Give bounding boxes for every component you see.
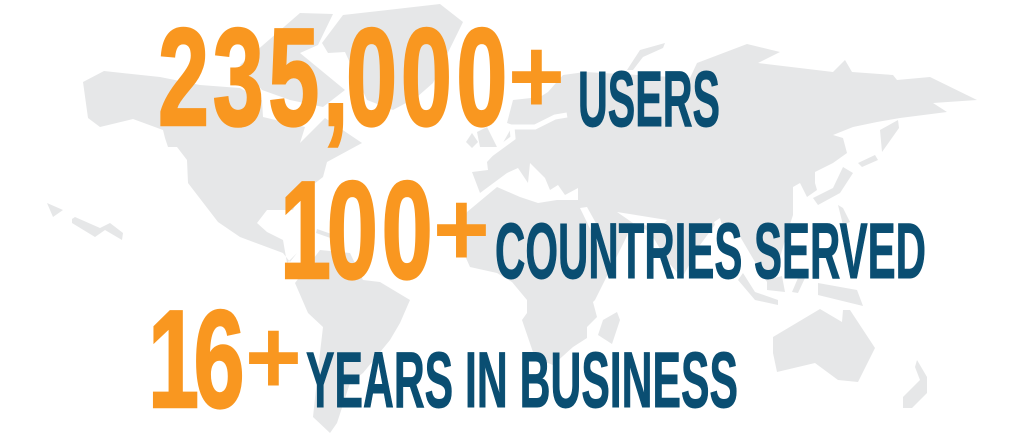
stat: 235,000+: + — [508, 15, 565, 136]
australia — [773, 309, 875, 382]
label: users: USERS — [578, 54, 720, 143]
madagascar — [598, 312, 620, 344]
sulawesi — [792, 278, 805, 293]
stat: 100+: + — [433, 168, 490, 289]
taiwan — [838, 205, 850, 225]
bay of bengal notch — [714, 218, 722, 228]
pacific islands — [47, 203, 63, 217]
baltic sea channel — [487, 115, 567, 157]
caribbean island — [316, 229, 343, 242]
south america — [295, 250, 410, 433]
north america — [83, 71, 362, 263]
ireland — [466, 133, 478, 148]
stat: 16+: + — [245, 296, 302, 417]
stat: 100+: 100 — [280, 152, 433, 308]
borneo — [767, 276, 785, 292]
stat: 235,000+: 235,000 — [158, 0, 507, 155]
stat: 16+: 16 — [148, 281, 245, 437]
japan — [813, 167, 853, 205]
new zealand — [903, 360, 927, 408]
kuril islands — [858, 155, 878, 167]
svalbard arc — [627, 43, 665, 70]
new guinea — [818, 283, 863, 306]
great britain — [477, 127, 497, 147]
red sea — [580, 207, 605, 245]
mediterranean sea — [467, 163, 578, 212]
kamchatka — [880, 120, 899, 152]
persian gulf — [617, 212, 667, 228]
greenland — [322, 4, 463, 110]
eurasia and africa — [458, 44, 977, 365]
sumatra — [738, 273, 778, 305]
arctic islands — [240, 13, 345, 107]
stat: 16+ — [148, 281, 302, 437]
pacific island chain — [72, 217, 123, 240]
